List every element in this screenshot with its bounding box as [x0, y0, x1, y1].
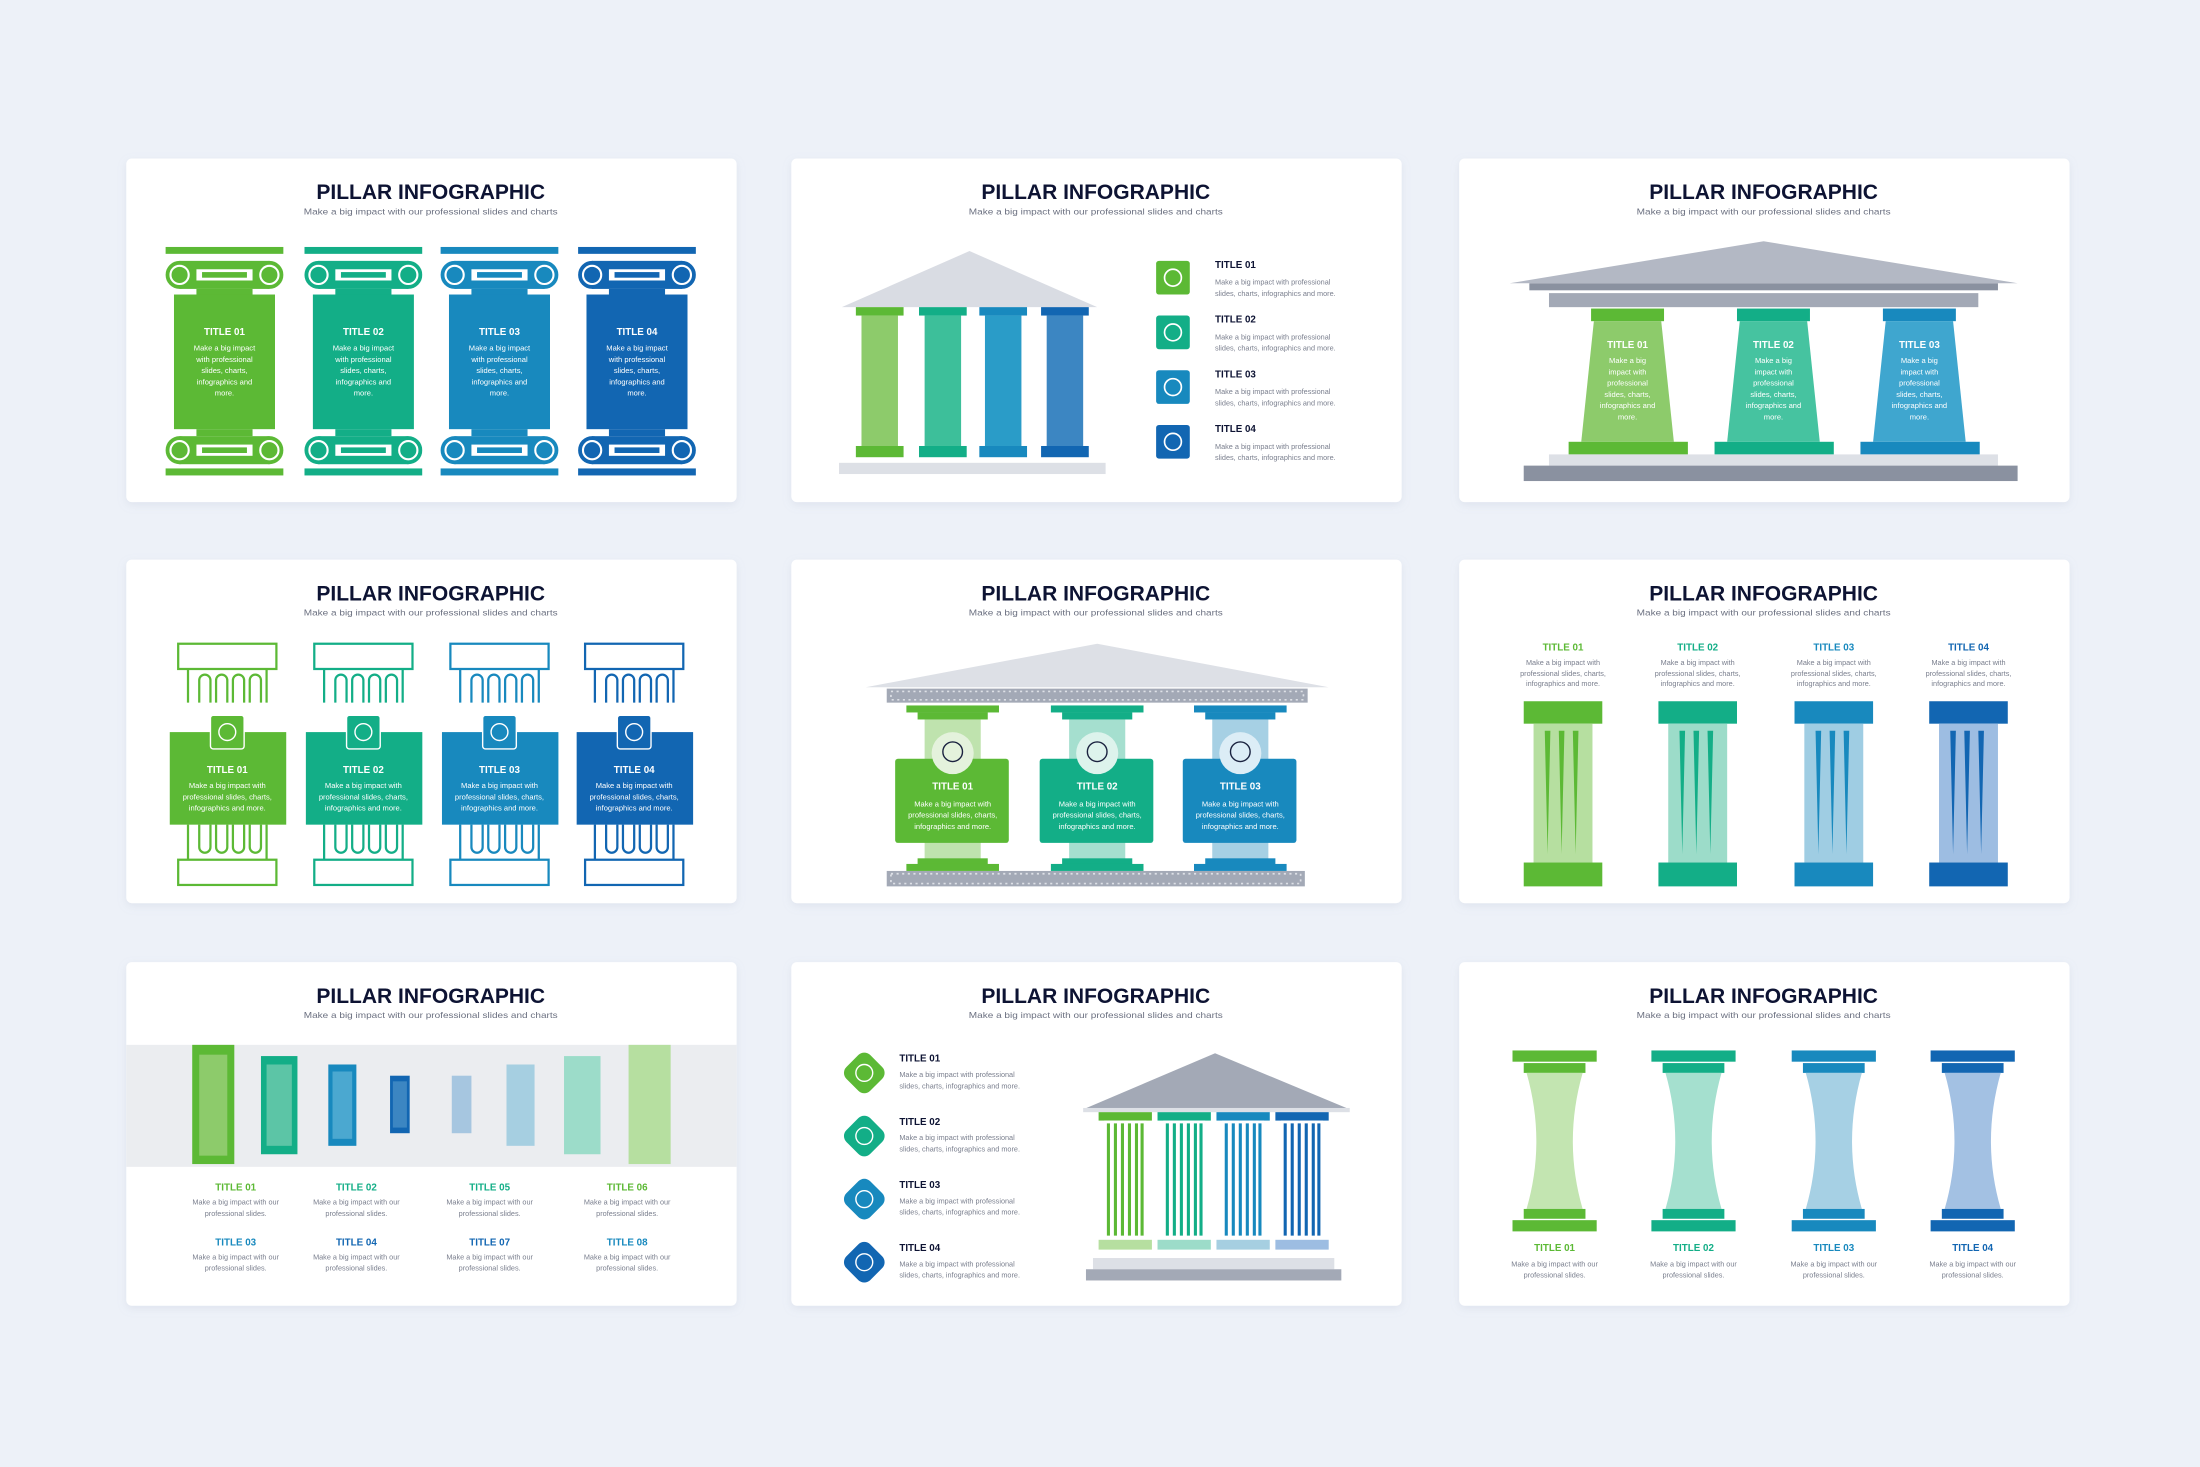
list item 2: Make a big impact with professional: [1215, 332, 1331, 341]
pillar 2: infographics and: [1746, 401, 1801, 410]
subtitle: Make a big impact with our professional slides and charts: [304, 207, 558, 217]
list item 3: slides, charts, infographics and more.: [899, 1208, 1020, 1217]
pillar 1: more.: [1618, 412, 1637, 421]
pillar 4: professional slides, charts,: [590, 792, 679, 801]
labels: TITLE 05: [469, 1183, 511, 1194]
pillar 4: [577, 644, 693, 885]
pillar 3: [1183, 705, 1296, 871]
list item 3: Make a big impact with professional: [1215, 387, 1331, 396]
pillar 1: Make a big impact with: [914, 799, 991, 808]
pillar 1: professional: [1607, 379, 1648, 388]
labels: TITLE 07: [469, 1237, 511, 1248]
pillar 2: TITLE 02: [1673, 1243, 1714, 1254]
pillar 2: infographics and more.: [1661, 679, 1735, 688]
pillar 1: professional slides, charts,: [183, 792, 272, 801]
list item 1: TITLE 01: [1215, 260, 1256, 271]
pillar 3: professional slides, charts,: [1791, 669, 1877, 678]
pillar 1: TITLE 01: [1543, 643, 1584, 654]
pillar 1: slides, charts,: [201, 366, 248, 375]
title: PILLAR INFOGRAPHIC: [981, 985, 1210, 1008]
pillar 3: infographics and: [1892, 401, 1947, 410]
list item 1: Make a big impact with professional: [899, 1070, 1015, 1079]
pillar 2: TITLE 02: [1677, 643, 1719, 654]
pillar 2: Make a big impact: [333, 344, 395, 353]
pillar 3: TITLE 03: [1899, 340, 1940, 351]
pillar 3: Make a big: [1901, 356, 1938, 365]
labels: TITLE 03: [215, 1237, 257, 1248]
pillar 3: more.: [490, 389, 509, 398]
pillar 2: professional slides, charts,: [319, 792, 408, 801]
pillar 2: more.: [1764, 412, 1783, 421]
bottom frieze: [887, 871, 1305, 886]
pillar 2: [1650, 1050, 1737, 1280]
list item 2: TITLE 02: [1215, 315, 1256, 326]
list item 1: [1156, 260, 1336, 298]
pillar 3: infographics and: [472, 377, 527, 386]
pillar 2: Make a big impact with: [1059, 799, 1136, 808]
labels: Make a big impact with our: [313, 1252, 400, 1261]
pillar 1: professional slides, charts,: [1520, 669, 1606, 678]
pillar 3: more.: [1910, 412, 1929, 421]
pillar 4: infographics and more.: [1931, 679, 2006, 688]
pillar 3: Make a big impact: [469, 344, 531, 353]
list item 2: Make a big impact with professional: [899, 1133, 1015, 1142]
list item 3: slides, charts, infographics and more.: [1215, 398, 1336, 407]
pillar 1: Make a big impact: [194, 344, 256, 353]
pillar 2: [304, 247, 422, 475]
pillar 3: TITLE 03: [479, 765, 520, 776]
list item 4: Make a big impact with professional: [1215, 442, 1331, 451]
pillar 4: infographics and more.: [596, 804, 673, 813]
list item 3: TITLE 03: [1215, 369, 1256, 380]
card 6: fluted pillars with titles above: [1459, 560, 2070, 903]
pillar 3: [441, 247, 558, 475]
pillar 3: [1790, 1050, 1878, 1280]
card 7: perspective colonnade: [126, 962, 737, 1306]
list item 1: TITLE 01: [899, 1054, 941, 1065]
pillar 2: TITLE 02: [1077, 782, 1118, 793]
roof: [1510, 241, 2018, 307]
pillar 4: TITLE 04: [1952, 1243, 1994, 1254]
subtitle: Make a big impact with our professional slides and charts: [304, 608, 558, 618]
pillar 1: TITLE 01: [932, 782, 974, 793]
labels: professional slides.: [459, 1209, 521, 1218]
list item 2: [840, 1112, 1020, 1160]
pillar 2: [1655, 643, 1741, 886]
temple: [839, 251, 1106, 474]
pillar 4: [1926, 643, 2011, 886]
pillar 1: slides, charts,: [1604, 390, 1651, 399]
pillar 1: Make a big impact with: [1526, 658, 1600, 667]
labels: Make a big impact with our: [446, 1198, 534, 1207]
pillar 1: TITLE 01: [207, 765, 248, 776]
pillar 2: TITLE 02: [343, 327, 384, 338]
card 2: temple with list: [791, 158, 1402, 502]
pillar 2: impact with: [1755, 367, 1792, 376]
pillar 4: TITLE 04: [617, 327, 658, 338]
pillar 4: Make a big impact with: [596, 781, 673, 790]
pillar 2: TITLE 02: [343, 765, 384, 776]
pillar 3: Make a big impact with: [1797, 658, 1871, 667]
pillar 3: Make a big impact with: [1202, 799, 1279, 808]
subtitle: Make a big impact with our professional slides and charts: [1637, 608, 1891, 618]
pillar 2: [1040, 705, 1153, 871]
pillar 3: infographics and more.: [1797, 679, 1871, 688]
title: PILLAR INFOGRAPHIC: [316, 181, 545, 204]
subtitle: Make a big impact with our professional slides and charts: [969, 207, 1224, 217]
labels: Make a big impact with our: [192, 1252, 280, 1261]
title: PILLAR INFOGRAPHIC: [1649, 582, 1878, 605]
title: PILLAR INFOGRAPHIC: [316, 985, 545, 1008]
subtitle: Make a big impact with our professional slides and charts: [969, 608, 1224, 618]
list item 4: [840, 1238, 1020, 1286]
pillar 1: infographics and more.: [189, 804, 266, 813]
base: [1524, 454, 2018, 481]
pillar 2: Make a big: [1755, 356, 1792, 365]
list item 4: slides, charts, infographics and more.: [899, 1271, 1020, 1280]
pillar 3: [1860, 309, 1980, 454]
pillar 3: Make a big impact with our: [1790, 1259, 1878, 1268]
labels: Make a big impact with our: [313, 1198, 400, 1207]
pillar 3: Make a big impact with: [461, 781, 538, 790]
labels: TITLE 04: [336, 1237, 377, 1248]
pillar 1: infographics and: [197, 377, 252, 386]
pillar 4: [1929, 1050, 2017, 1280]
pillar 3: professional: [1899, 379, 1940, 388]
labels: TITLE 08: [607, 1237, 648, 1248]
list item 4: slides, charts, infographics and more.: [1215, 453, 1336, 462]
pillar 1: [1520, 643, 1606, 886]
pillar 1: [1511, 1050, 1598, 1280]
list item 1: Make a big impact with professional: [1215, 278, 1331, 287]
pillar 2: Make a big impact with our: [1650, 1259, 1737, 1268]
card 3: trapezoid pillars: [1459, 158, 2070, 502]
list item 3: [840, 1175, 1020, 1223]
pillar 1: Make a big: [1609, 356, 1646, 365]
pillar 1: Make a big impact with our: [1511, 1259, 1598, 1268]
pillar 1: TITLE 01: [1534, 1243, 1576, 1254]
pillar 3: professional slides, charts,: [1196, 811, 1285, 820]
pillar 2: professional slides.: [1663, 1271, 1724, 1280]
temple: [1083, 1053, 1350, 1280]
pillar 1: [895, 705, 1009, 871]
labels: professional slides.: [596, 1209, 658, 1218]
list item 4: TITLE 04: [1215, 424, 1256, 435]
list item 4: [1156, 424, 1336, 462]
list item 1: slides, charts, infographics and more.: [1215, 289, 1336, 298]
labels: professional slides.: [205, 1264, 267, 1273]
pillar 4: professional slides, charts,: [1926, 669, 2011, 678]
pillar 1: professional slides, charts,: [908, 811, 997, 820]
pillar 4: infographics and: [609, 377, 665, 386]
pillar 2: [1715, 309, 1834, 454]
labels: Make a big impact with our: [584, 1198, 671, 1207]
pillar 3: TITLE 03: [1813, 643, 1855, 654]
colonnade band: [126, 1045, 737, 1167]
pillar 1: Make a big impact with: [189, 781, 266, 790]
pillar 4: [578, 247, 696, 475]
list item 2: TITLE 02: [899, 1117, 941, 1128]
card 5: temple with boxes: [791, 560, 1402, 903]
roof and frieze: [866, 644, 1329, 703]
card 4: outline pillars: [126, 560, 737, 903]
pillar 2: infographics and more.: [1059, 822, 1136, 831]
pillar 2: more.: [354, 389, 373, 398]
pillar 1: professional slides.: [1524, 1271, 1586, 1280]
pillar 3: with professional: [470, 355, 528, 364]
pillar 3: professional slides, charts,: [455, 792, 544, 801]
pillar 1: [170, 644, 286, 885]
list item 2: [1156, 315, 1336, 353]
list item 1: slides, charts, infographics and more.: [899, 1081, 1020, 1090]
card 1: ionic pillars: [126, 158, 737, 502]
card 9: hourglass pillars: [1459, 962, 2070, 1306]
labels: TITLE 01: [215, 1183, 257, 1194]
pillar 2: with professional: [334, 355, 392, 364]
pillar 2: slides, charts,: [1750, 390, 1797, 399]
pillar 2: Make a big impact with: [325, 781, 402, 790]
pillar 3: TITLE 03: [1220, 782, 1261, 793]
pillar 4: with professional: [608, 355, 665, 364]
labels: professional slides.: [205, 1209, 267, 1218]
list item 3: Make a big impact with professional: [899, 1196, 1015, 1205]
list item 2: slides, charts, infographics and more.: [899, 1144, 1020, 1153]
labels: Make a big impact with our: [584, 1252, 671, 1261]
labels: professional slides.: [596, 1264, 658, 1273]
subtitle: Make a big impact with our professional slides and charts: [304, 1010, 558, 1020]
pillar 1: infographics and more.: [914, 822, 991, 831]
title: PILLAR INFOGRAPHIC: [1649, 985, 1878, 1008]
pillar 4: Make a big impact with our: [1929, 1259, 2017, 1268]
pillar 4: slides, charts,: [614, 366, 660, 375]
list item 4: Make a big impact with professional: [899, 1259, 1015, 1268]
pillar 4: TITLE 04: [1948, 643, 1989, 654]
pillar 2: infographics and more.: [325, 804, 402, 813]
list item 4: TITLE 04: [899, 1243, 941, 1254]
list item 1: [840, 1049, 1020, 1097]
pillar 3: slides, charts,: [476, 366, 523, 375]
labels: professional slides.: [325, 1209, 387, 1218]
pillar 1: [166, 247, 283, 475]
labels: [192, 1183, 671, 1273]
title: PILLAR INFOGRAPHIC: [316, 582, 545, 605]
labels: TITLE 02: [336, 1183, 377, 1194]
pillar 3: impact with: [1900, 367, 1938, 376]
pillar 4: Make a big impact: [606, 344, 669, 353]
pillar 2: slides, charts,: [340, 366, 387, 375]
pillar 1: more.: [215, 389, 234, 398]
subtitle: Make a big impact with our professional slides and charts: [1637, 1010, 1891, 1020]
pillar 3: slides, charts,: [1896, 390, 1943, 399]
pillar 2: professional: [1753, 379, 1794, 388]
list item 2: slides, charts, infographics and more.: [1215, 344, 1336, 353]
pillar 2: Make a big impact with: [1661, 658, 1735, 667]
pillar 1: TITLE 01: [1607, 340, 1649, 351]
title: PILLAR INFOGRAPHIC: [981, 582, 1210, 605]
pillar 2: [306, 644, 422, 885]
pillar 3: [442, 644, 558, 885]
subtitle: Make a big impact with our professional slides and charts: [1637, 207, 1891, 217]
pillar 3: TITLE 03: [1813, 1243, 1855, 1254]
pillar 2: professional slides, charts,: [1053, 811, 1142, 820]
pillar 3: infographics and more.: [461, 804, 538, 813]
pillar 4: TITLE 04: [614, 765, 655, 776]
title: PILLAR INFOGRAPHIC: [981, 181, 1210, 204]
pillar 1: infographics and: [1600, 401, 1655, 410]
pillar 2: infographics and: [336, 377, 391, 386]
subtitle: Make a big impact with our professional slides and charts: [969, 1010, 1224, 1020]
pillar 2: TITLE 02: [1753, 340, 1794, 351]
labels: Make a big impact with our: [446, 1252, 534, 1261]
pillar 1: with professional: [195, 355, 253, 364]
labels: TITLE 06: [607, 1183, 648, 1194]
pillar 1: impact with: [1609, 367, 1646, 376]
pillar 3: infographics and more.: [1202, 822, 1279, 831]
pillar 4: more.: [627, 389, 647, 398]
labels: professional slides.: [325, 1264, 387, 1273]
pillar 4: Make a big impact with: [1931, 658, 2006, 667]
title: PILLAR INFOGRAPHIC: [1649, 181, 1878, 204]
pillar 1: TITLE 01: [204, 327, 245, 338]
pillar 3: professional slides.: [1803, 1271, 1865, 1280]
pillar 1: [1569, 309, 1688, 454]
pillar 3: [1791, 643, 1877, 886]
list item 3: [1156, 369, 1336, 407]
list item 3: TITLE 03: [899, 1180, 941, 1191]
pillar 4: professional slides.: [1942, 1271, 2004, 1280]
card 8: list and temple: [791, 962, 1402, 1306]
labels: professional slides.: [459, 1264, 521, 1273]
labels: Make a big impact with our: [192, 1198, 280, 1207]
pillar 2: professional slides, charts,: [1655, 669, 1741, 678]
pillar 1: infographics and more.: [1526, 679, 1600, 688]
pillar 3: TITLE 03: [479, 327, 520, 338]
